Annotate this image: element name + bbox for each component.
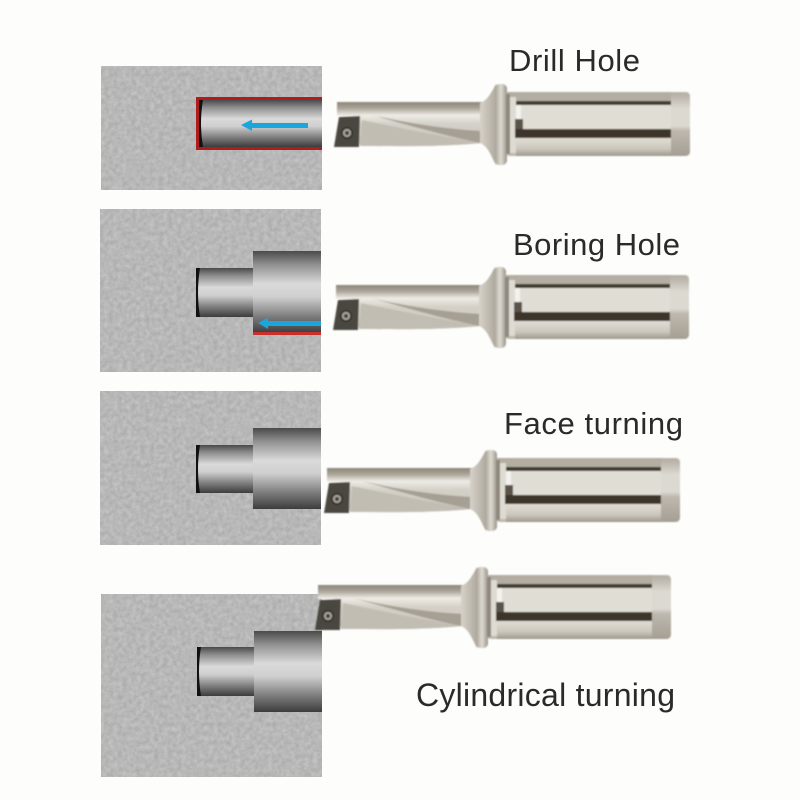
heading: Boring Hole: Boring Hole [513, 227, 680, 262]
panel: cylindrical turning workpiece [101, 594, 322, 777]
stepped bore large [253, 428, 321, 509]
heading: Drill Hole: Drill Hole [509, 43, 640, 78]
stepped bore small [196, 445, 254, 493]
arrow: blue feed direction [241, 120, 308, 131]
stepped bore small [197, 647, 255, 696]
tool: boring hole [333, 267, 689, 348]
panel: boring hole workpiece [100, 209, 321, 372]
tool: face turning [324, 450, 680, 531]
tool: drill hole [334, 84, 690, 165]
arrow: blue feed direction [258, 318, 321, 329]
stepped bore small [196, 268, 254, 317]
red cut line [253, 332, 321, 335]
stepped bore large [254, 631, 322, 712]
panel: face turning workpiece [100, 391, 321, 545]
panel: drill hole workpiece [101, 66, 322, 190]
bore with red outline [196, 97, 322, 150]
heading: Cylindrical turning: Cylindrical turning [416, 677, 675, 713]
heading: Face turning: Face turning [504, 406, 683, 441]
tool: cylindrical turning [315, 567, 671, 648]
stepped bore large [253, 251, 321, 333]
